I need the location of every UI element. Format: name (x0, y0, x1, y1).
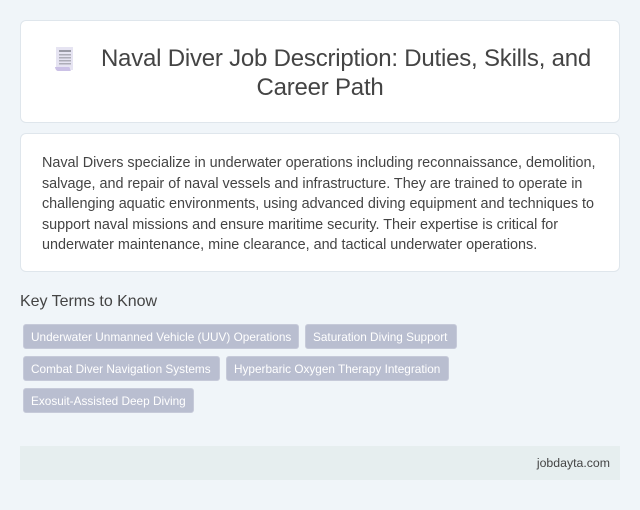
description text: support naval missions and ensure maritime security. Their expertise is critical for (42, 217, 558, 233)
description text: Naval Divers specialize in underwater operations including reconnaissance, demolition, (42, 155, 595, 171)
footer bar (20, 446, 620, 480)
heading: key terms: Key Terms to Know (20, 293, 157, 310)
tag: Saturation Diving Support (313, 330, 447, 344)
panel: title card (20, 20, 620, 123)
title: Career Path (256, 74, 384, 101)
tag: Hyperbaric Oxygen Therapy Integration (234, 362, 440, 376)
tag (226, 356, 449, 381)
panel: description card (20, 133, 620, 272)
tag list (23, 324, 457, 413)
tag (23, 356, 220, 381)
description text: salvage, and repair of naval vessels and infrastructure. They are trained to operate in (42, 176, 582, 192)
title (101, 45, 591, 101)
description text: challenging aquatic environments, using advanced diving equipment and techniques to (42, 196, 594, 212)
description text (42, 155, 595, 253)
tag (305, 324, 457, 349)
tag (23, 388, 194, 413)
tag: Combat Diver Navigation Systems (31, 362, 211, 376)
tag: Exosuit-Assisted Deep Diving (31, 394, 186, 408)
footer source text: jobdayta.com (537, 456, 610, 470)
tag: Underwater Unmanned Vehicle (UUV) Operations (31, 330, 291, 344)
title: Naval Diver Job Description: Duties, Skills, and (101, 45, 591, 72)
icon: document (55, 47, 73, 71)
description text: underwater maintenance, mine clearance, and tactical underwater operations. (42, 237, 537, 253)
tag (23, 324, 299, 349)
